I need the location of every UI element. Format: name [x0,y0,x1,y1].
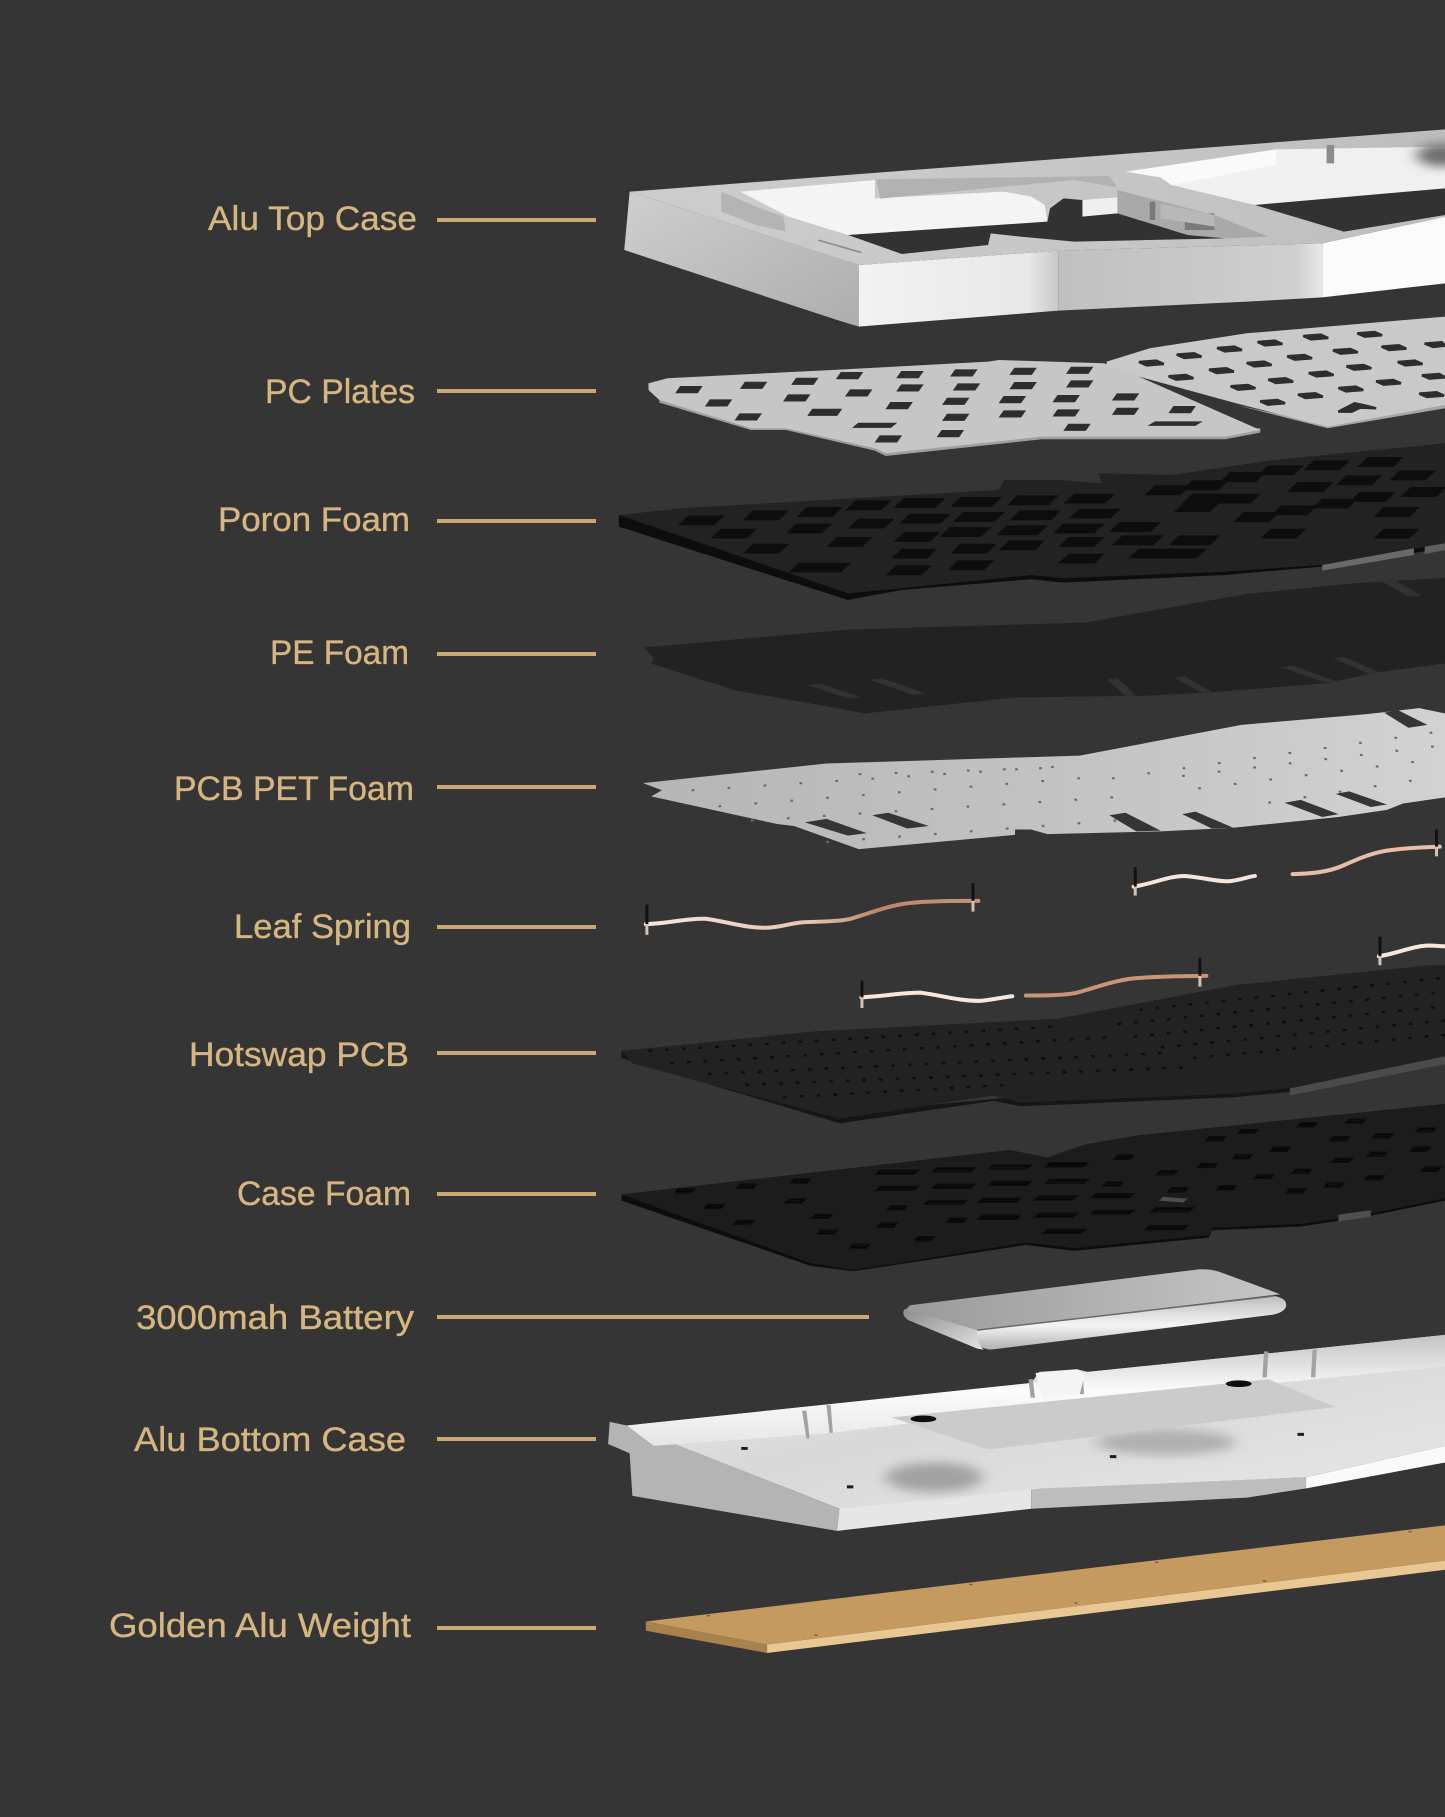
part: alu top case [624,129,1445,327]
label: pc plates [265,373,596,411]
label: poron foam [218,501,596,539]
label: 3000mah battery [136,1299,869,1337]
label: hotswap pcb: Hotswap PCB [189,1036,409,1074]
part: alu bottom case [608,1335,1445,1531]
spring 5 [1379,937,1445,965]
label: alu bottom case: Alu Bottom Case [134,1421,406,1459]
label: 3000mah battery: 3000mah Battery [136,1299,414,1337]
spring 4 [861,958,1206,1008]
spring 3 [1293,830,1440,874]
part: pc plates [649,317,1445,456]
label: case foam: Case Foam [237,1175,411,1213]
part: leaf spring [646,830,1445,1008]
label: pe foam: PE Foam [270,634,409,672]
label: poron foam: Poron Foam [218,501,410,539]
label: pcb pet foam: PCB PET Foam [174,770,414,808]
part: pcb pet foam [643,708,1445,849]
label: leaf spring [234,908,596,946]
label: pcb pet foam [174,770,596,808]
label: hotswap pcb [189,1036,596,1074]
spring 1 [646,883,978,935]
part: poron foam [619,443,1445,600]
label: golden alu weight [109,1607,596,1645]
part: case foam [622,1104,1445,1271]
part: golden alu weight [646,1525,1445,1653]
label: golden alu weight: Golden Alu Weight [109,1607,412,1645]
label: alu top case: Alu Top Case [208,200,417,238]
part: battery [903,1269,1286,1350]
label: alu top case [208,200,596,238]
part: pe foam [643,578,1445,714]
spring 2 [1134,867,1255,896]
label: pe foam [270,634,596,672]
part: hotswap pcb [622,965,1445,1123]
label: alu bottom case [134,1421,596,1459]
label: case foam [237,1175,596,1213]
label: pc plates: PC Plates [265,373,415,411]
label: leaf spring: Leaf Spring [234,908,411,946]
